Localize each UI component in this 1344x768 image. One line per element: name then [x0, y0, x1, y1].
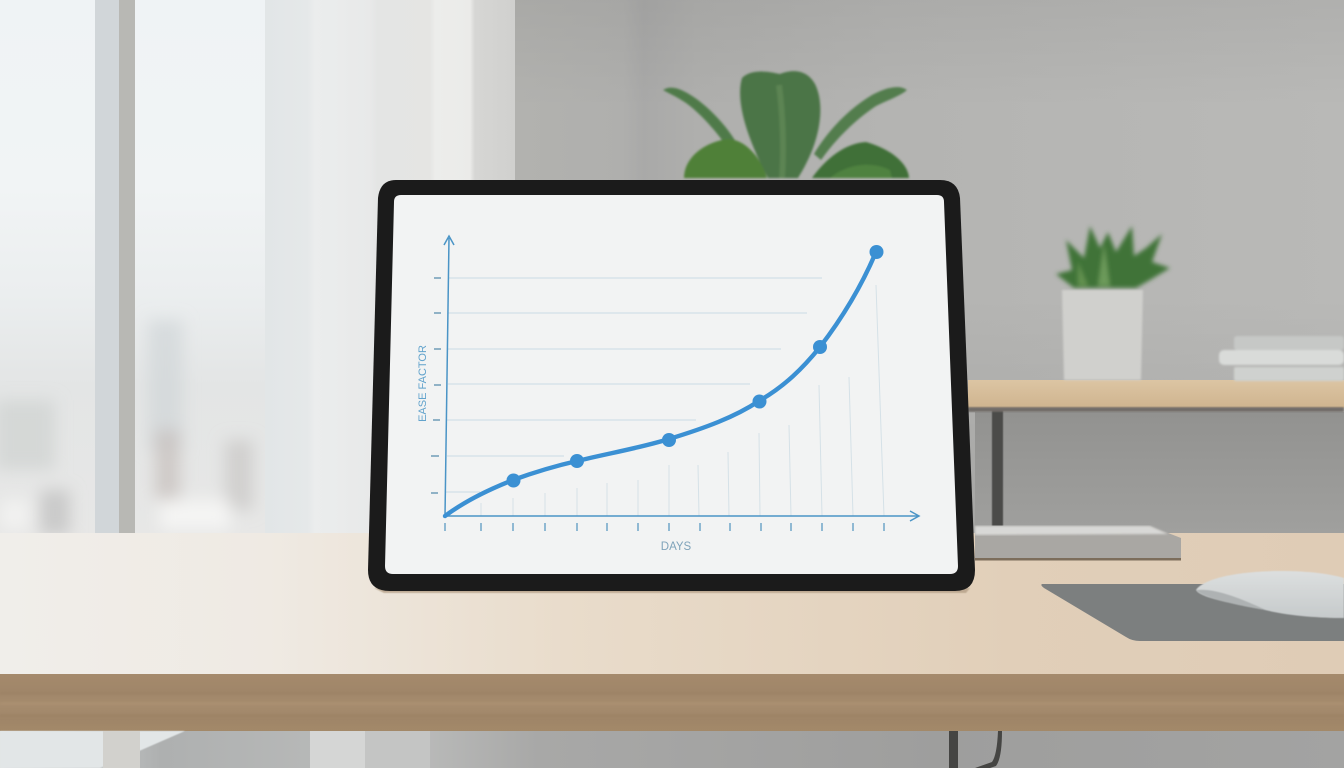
background: sheer curtain [265, 0, 515, 535]
background: window with blurred city [0, 0, 266, 535]
background: room wall [510, 0, 1344, 540]
x axis label: DAYS [661, 541, 692, 553]
tablet shadow [374, 588, 970, 593]
y axis label: EASE FACTOR [417, 345, 429, 422]
large plant behind tablet [663, 71, 909, 178]
keyboard [975, 526, 1181, 560]
x axis with arrow [445, 511, 919, 521]
chart: ease factor over days [417, 236, 919, 553]
vertical grid lines [481, 285, 884, 516]
tablet [368, 180, 975, 593]
horizontal grid lines [446, 278, 822, 492]
tablet screen [385, 195, 958, 574]
x axis ticks [445, 523, 884, 531]
y axis with arrow [444, 236, 454, 516]
data points [506, 245, 884, 488]
small potted plant [1056, 226, 1170, 380]
y axis ticks [431, 278, 441, 493]
tablet body [368, 180, 975, 591]
floor area and desk legs under the desk [0, 731, 1344, 768]
mouse pad [1041, 584, 1344, 641]
back shelf with leg [968, 380, 1344, 534]
stack of books [1219, 336, 1344, 381]
desk top [0, 533, 1344, 676]
mouse [1196, 571, 1344, 618]
growth curve [445, 252, 876, 516]
desk front edge [0, 674, 1344, 731]
